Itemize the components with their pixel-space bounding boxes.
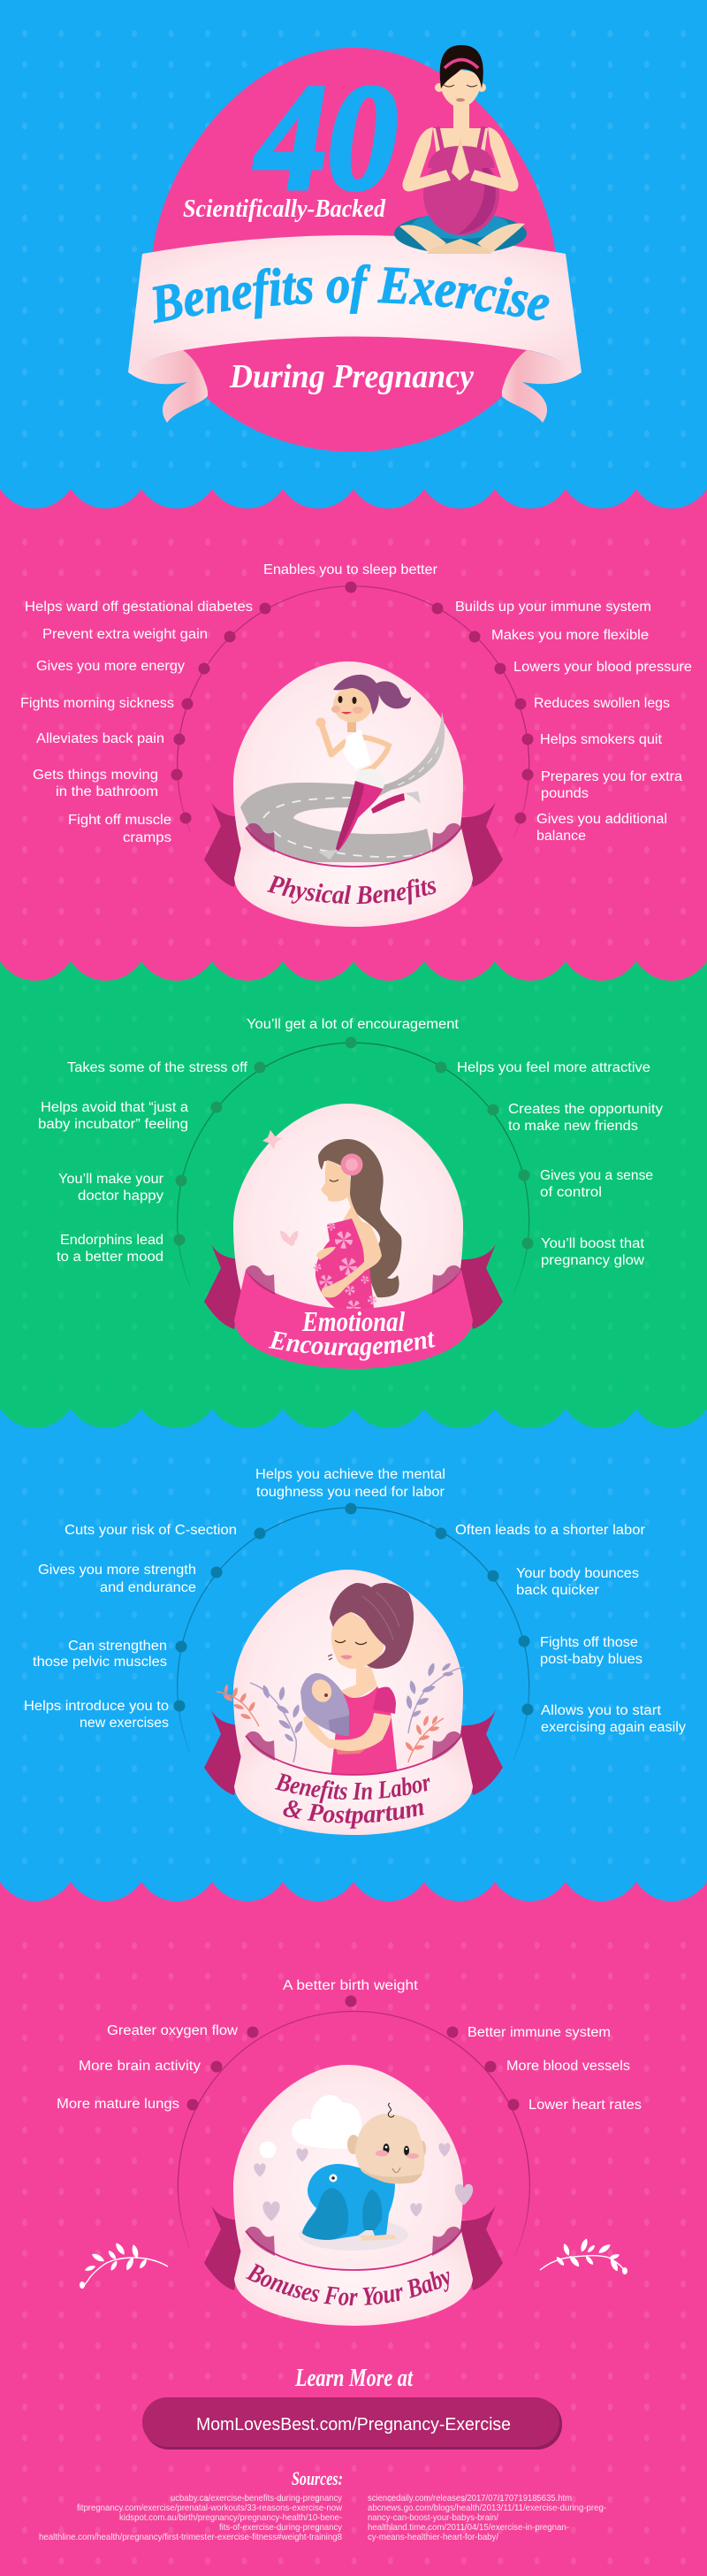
text: left sources: fits-of-exercise-during-pregnancy	[219, 2522, 343, 2533]
benefit: heart rates: Lower heart rates	[528, 2098, 642, 2113]
benefit: exercising again: Allows you to start	[541, 1703, 662, 1718]
benefit: control: Gives you a sense	[540, 1168, 653, 1183]
title bowl	[234, 2227, 473, 2326]
benefit: sleep	[263, 562, 437, 592]
subtitle: during pregnancy: During Pregnancy	[229, 358, 474, 395]
benefit: new friends	[488, 1102, 663, 1134]
benefit: doctor: You’ll make your	[58, 1172, 163, 1187]
benefit: strength: and endurance	[100, 1580, 196, 1595]
benefit: endorphins	[57, 1233, 186, 1265]
benefit: shorter labor: Often leads to a shorter labor	[455, 1523, 645, 1538]
benefit: new friends: to make new friends	[508, 1119, 638, 1134]
text: right sources	[368, 2493, 606, 2542]
benefit: flexible: Makes you more flexible	[491, 628, 649, 643]
button: website url: MomLovesBest.com/Pregnancy-Exercise	[196, 2415, 511, 2435]
subtitle: scientifically-backed: Scientifically-Backed	[183, 195, 385, 223]
benefit: strength	[38, 1563, 223, 1595]
connector arc	[178, 2011, 529, 2257]
section title: encouragement: Encouragement	[269, 1331, 436, 1361]
benefit: stress: Takes some of the stress off	[67, 1060, 248, 1075]
illustration egg: crawling baby	[204, 2065, 503, 2301]
connector arc	[178, 586, 529, 838]
section title: bonuses for your baby: Bonuses For Your Baby	[246, 2264, 449, 2305]
benefit: blood vessels: More blood vessels	[506, 2059, 630, 2074]
benefit: bathroom	[33, 768, 182, 799]
panel: bonuses for your baby	[57, 1978, 642, 2326]
benefit: muscle cramps: Fight off muscle	[68, 813, 171, 828]
heading: learn more: Learn More at	[294, 2364, 414, 2392]
benefit: bounces back	[488, 1566, 639, 1598]
benefit: glow: pregnancy glow	[541, 1253, 645, 1268]
benefit: doctor: doctor happy	[78, 1189, 163, 1204]
benefit: energy: Gives you more energy	[36, 659, 185, 674]
benefit: baby blues	[518, 1635, 642, 1667]
benefit: baby blues: post-baby blues	[540, 1652, 642, 1667]
illustration egg: runner	[204, 661, 503, 898]
benefit: mental toughness: toughness you need for labor	[256, 1485, 445, 1500]
benefit: extra pounds: Prepares you for extra	[541, 769, 682, 784]
benefit: pelvic muscles	[33, 1639, 187, 1670]
panel: benefits in labor and postpartum	[24, 1467, 686, 1835]
benefit: gestational diabetes: Helps ward off gestational diabetes	[25, 600, 253, 615]
text: left sources: ucbaby.ca/exercise-benefits-during-pregnancy	[171, 2493, 343, 2503]
benefit: weight gain: Prevent extra weight gain	[42, 627, 208, 642]
benefit: baby incubator: Helps avoid that “just a	[41, 1100, 188, 1115]
benefit: exercising again	[521, 1703, 686, 1735]
benefit: encouragement	[247, 1017, 460, 1049]
benefit: morning sickness: Fights morning sickness	[20, 696, 174, 711]
benefit: lungs: More mature lungs	[57, 2097, 179, 2112]
benefit: mental toughness: Helps you achieve the mental	[255, 1467, 445, 1482]
benefit: encouragement: You’ll get a lot of encouragement	[247, 1017, 460, 1032]
benefit: extra pounds: pounds	[541, 786, 589, 801]
benefit: sleep: Enables you to sleep better	[263, 562, 437, 577]
title bowl	[234, 1265, 473, 1369]
benefit: control	[518, 1168, 653, 1200]
benefit: pelvic muscles: those pelvic muscles	[33, 1655, 167, 1670]
panel: title header	[128, 45, 582, 452]
button: website url	[142, 2397, 562, 2450]
benefit: brain: More brain activity	[79, 2059, 201, 2074]
benefit: mental toughness	[255, 1467, 445, 1514]
section title: postpartum: & Postpartum	[283, 1800, 424, 1829]
benefit: bounces back: back quicker	[516, 1583, 599, 1598]
benefit: new exercises: new exercises	[80, 1716, 169, 1731]
benefit: c-section: Cuts your risk of C-section	[65, 1523, 237, 1538]
benefit: new friends: Creates the opportunity	[508, 1102, 663, 1117]
benefit: control: of control	[540, 1185, 602, 1200]
text: right sources: cy-means-healthier-heart-for-baby/	[368, 2532, 498, 2542]
text: left sources: kidspot.com.au/birth/pregnancy/pregnancy-health/10-bene-	[119, 2512, 342, 2523]
section title: benefits in labor: Benefits In Labor	[274, 1773, 430, 1804]
title bowl	[234, 1731, 473, 1835]
benefit: extra pounds	[521, 769, 682, 801]
text: left sources: healthline.com/health/pregnancy/first-trimester-exercise-fitness#weight-training8	[39, 2532, 342, 2542]
benefit: exercising again: exercising again easily	[541, 1720, 686, 1735]
connector arc	[178, 1043, 529, 1294]
benefit: baby incubator: baby incubator” feeling	[38, 1117, 188, 1132]
section title: emotional: Emotional	[301, 1305, 405, 1337]
benefit: endorphins: to a better mood	[57, 1250, 163, 1265]
benefit: strength: Gives you more strength	[38, 1563, 196, 1578]
title bowl	[234, 822, 473, 927]
panel: physical benefits	[20, 562, 692, 927]
section title: physical benefits: Physical Benefits	[267, 875, 437, 905]
benefit: baby incubator	[38, 1100, 223, 1132]
icon: right branch	[540, 2237, 627, 2274]
big number 40: 40	[254, 54, 398, 222]
benefit: immune system: Builds up your immune system	[455, 600, 651, 615]
benefit: muscle cramps: cramps	[123, 830, 171, 845]
benefit: swollen legs: Reduces swollen legs	[534, 696, 670, 711]
illustration egg: mother and baby	[204, 1570, 503, 1806]
benefit: glow	[521, 1236, 645, 1268]
benefit: doctor	[58, 1172, 187, 1204]
benefit: attractive: Helps you feel more attractive	[457, 1060, 650, 1075]
panel: emotional encouragement	[38, 1017, 663, 1369]
text: right sources: nancy-can-boost-your-babys-brain/	[368, 2512, 498, 2523]
icon: left branch	[80, 2242, 168, 2289]
benefit: baby blues: Fights off those	[540, 1635, 638, 1650]
benefit: birth weight: A better birth weight	[283, 1978, 419, 1993]
panel: footer	[39, 2364, 606, 2542]
benefit: balance	[514, 812, 667, 844]
benefit: bathroom: Gets things moving	[33, 768, 158, 783]
title: benefits of exercise: Benefits of Exercise	[152, 264, 550, 324]
title ribbon	[128, 235, 582, 423]
benefit: new exercises: Helps introduce you to	[24, 1699, 169, 1714]
illustration: yoga woman	[394, 45, 527, 254]
benefit: birth weight	[283, 1978, 419, 2007]
benefit: pelvic muscles: Can strengthen	[68, 1639, 167, 1654]
benefit: balance: balance	[536, 829, 586, 844]
text: right sources: abcnews.go.com/blogs/health/2013/11/11/exercise-during-preg-	[368, 2503, 606, 2513]
connector arc	[178, 1508, 529, 1760]
benefit: muscle cramps	[68, 812, 191, 845]
text: left sources: fitpregnancy.com/exercise/prenatal-workouts/33-reasons-exercise-now	[77, 2503, 342, 2513]
benefit: endorphins: Endorphins lead	[60, 1233, 163, 1248]
text: left sources	[39, 2493, 343, 2542]
benefit: baby immune system: Better immune system	[468, 2025, 611, 2040]
heading: sources: Sources:	[292, 2467, 343, 2489]
benefit: bounces back: Your body bounces	[516, 1566, 639, 1581]
text: right sources: healthland.time.com/2011/04/15/exercise-in-pregnan-	[368, 2522, 569, 2533]
benefit: back pain: Alleviates back pain	[36, 731, 164, 746]
text: right sources: sciencedaily.com/releases/2017/07/170719185635.htm	[368, 2493, 572, 2503]
benefit: balance: Gives you additional	[536, 812, 667, 827]
benefit: smokers: Helps smokers quit	[540, 732, 663, 747]
benefit: oxygen: Greater oxygen flow	[107, 2023, 239, 2038]
illustration egg: pregnant woman	[204, 1104, 503, 1340]
pink egg backdrop	[151, 48, 557, 452]
benefit: blood pressure: Lowers your blood pressure	[513, 660, 692, 675]
benefit: new exercises	[24, 1699, 186, 1731]
benefit: bathroom: in the bathroom	[56, 784, 158, 799]
benefit: glow: You’ll boost that	[541, 1236, 645, 1251]
